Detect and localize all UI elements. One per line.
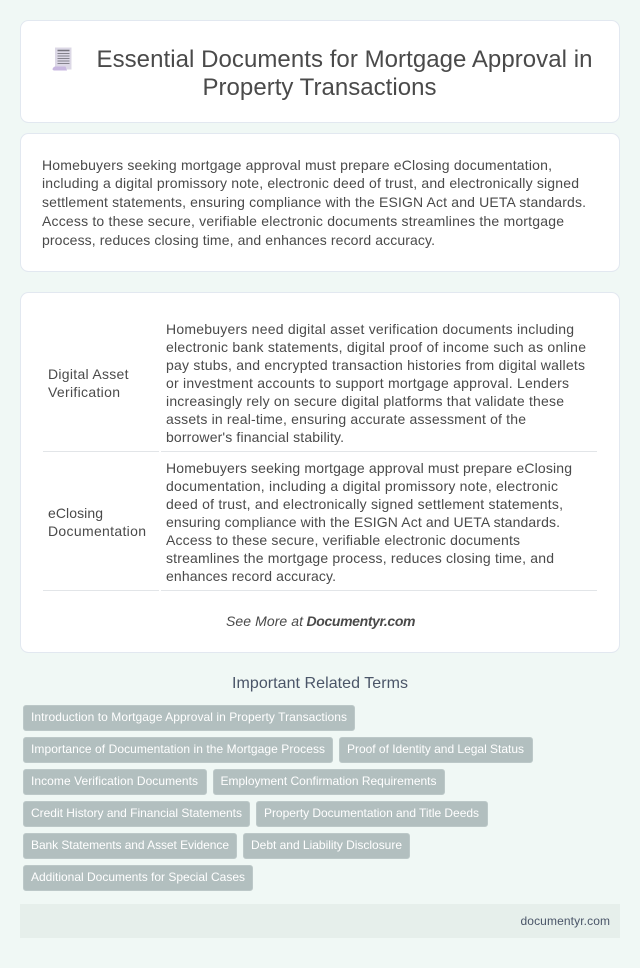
link: see more: See More at: [226, 613, 304, 629]
row text: eclosing documentation: streamlines the mortgage process, reduces closing time, and: [166, 550, 554, 566]
row text: digital asset verification: borrower's financial stability.: [166, 429, 344, 445]
row text: digital asset verification: pay stubs, and encrypted transaction histories from digital wallets: [166, 357, 585, 373]
tag: Income Verification Documents: [31, 774, 198, 788]
row text: digital asset verification: [166, 321, 586, 445]
panel: introduction: [20, 134, 620, 272]
icon: document scroll: [52, 48, 72, 70]
tag: Introduction to Mortgage Approval in Property Transactions: [31, 710, 347, 724]
text: introduction paragraph: [42, 157, 586, 248]
panel: document table: [20, 292, 620, 652]
link: see more: [226, 613, 416, 629]
text: introduction paragraph: including a digital promissory note, electronic deed of trust, and electronically signed: [42, 175, 579, 191]
tags: related terms: [24, 706, 532, 890]
title: Essential Documents for Mortgage Approval in: [96, 46, 592, 73]
row text: eclosing documentation: enhances record accuracy.: [166, 568, 336, 584]
title: [96, 46, 592, 101]
row text: digital asset verification: assets in real-time, ensuring accurate assessment of the: [166, 411, 526, 427]
text: introduction paragraph: settlement statements, ensuring compliance with the ESIGN Act and UETA standards.: [42, 194, 586, 210]
tag: Bank Statements and Asset Evidence: [31, 838, 229, 852]
tag: [214, 770, 444, 794]
link: see more: Documentyr.com: [306, 613, 416, 629]
text: introduction paragraph: process, reduces closing time, and enhances record accuracy.: [42, 232, 435, 248]
tag: Debt and Liability Disclosure: [251, 838, 402, 852]
tag: Proof of Identity and Legal Status: [347, 742, 524, 756]
row label: eclosing documentation: Documentation: [48, 523, 146, 539]
row text: eclosing documentation: Homebuyers seeking mortgage approval must prepare eClosing: [166, 460, 572, 476]
row label: digital asset verification: [48, 366, 129, 400]
tag: [244, 834, 410, 858]
tag: [24, 738, 332, 762]
row label: digital asset verification: Digital Asset: [48, 366, 129, 382]
tag: Property Documentation and Title Deeds: [264, 806, 479, 820]
tag: [24, 770, 206, 794]
row text: digital asset verification: or investment accounts to support mortgage approval. Lenders: [166, 375, 569, 391]
footer text: documentyr.com: [520, 914, 610, 928]
tag: [340, 738, 532, 762]
row label: eclosing documentation: eClosing: [48, 505, 103, 521]
row text: digital asset verification: electronic bank statements, digital proof of income such as online: [166, 339, 586, 355]
panel: header card: [20, 20, 620, 122]
row text: digital asset verification: Homebuyers need digital asset verification documents including: [166, 321, 574, 337]
footer: [20, 904, 620, 938]
title: Property Transactions: [202, 74, 436, 101]
row text: eclosing documentation: documentation, including a digital promissory note, electronic: [166, 478, 558, 494]
row label: eclosing documentation: [48, 505, 146, 539]
tag: [24, 834, 236, 858]
tag: [24, 706, 354, 730]
tag: Credit History and Financial Statements: [31, 806, 242, 820]
tag: [24, 802, 250, 826]
row text: eclosing documentation: ensuring compliance with the ESIGN Act and UETA standards.: [166, 514, 560, 530]
row text: digital asset verification: increasingly rely on secure digital platforms that validate these: [166, 393, 564, 409]
row text: eclosing documentation: deed of trust, and electronically signed settlement statements,: [166, 496, 563, 512]
text: introduction paragraph: Homebuyers seeking mortgage approval must prepare eClosing documentation,: [42, 157, 552, 173]
tag: Employment Confirmation Requirements: [220, 774, 436, 788]
tag: Importance of Documentation in the Mortgage Process: [31, 742, 325, 756]
tag: [256, 802, 488, 826]
row label: digital asset verification: Verification: [48, 384, 120, 400]
text: introduction paragraph: Access to these secure, verifiable electronic documents streamlines the mortgage: [42, 213, 564, 229]
row text: eclosing documentation: [166, 460, 572, 584]
heading: important related terms: Important Related Terms: [232, 675, 408, 692]
tag: Additional Documents for Special Cases: [31, 870, 245, 884]
tag: [24, 866, 252, 890]
row text: eclosing documentation: Access to these secure, verifiable electronic documents: [166, 532, 520, 548]
